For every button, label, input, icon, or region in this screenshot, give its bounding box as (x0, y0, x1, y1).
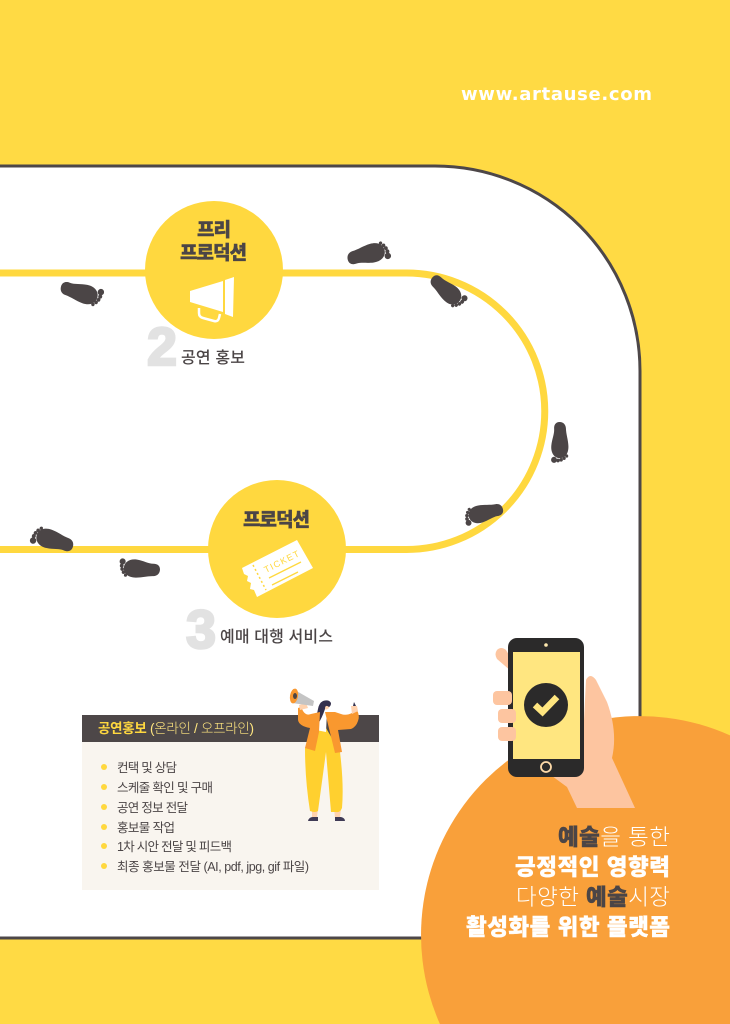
hand and arm (540, 676, 635, 808)
slogan text: 긍정적인 영향력 (515, 855, 670, 880)
heading: production: 프로덕션 (243, 509, 310, 531)
number 2: 2 (147, 317, 177, 377)
slogan text: 활성화를 위한 플랫폼 (466, 915, 670, 940)
bullet list (101, 761, 309, 874)
step circle: production (208, 480, 346, 618)
panel: promotion list (82, 715, 379, 890)
heading: pre-production: 프리 (197, 219, 231, 241)
footprints (29, 240, 569, 580)
icon: ticket: TICKET (262, 548, 302, 575)
icon: check mark (524, 683, 568, 727)
label: performance promotion: 공연 홍보 (181, 349, 245, 367)
bullet list: 홍보물 작업 (117, 821, 175, 835)
website url: www.artause.com (461, 84, 652, 105)
panel heading: 공연홍보 (온라인 / 오프라인) (98, 720, 254, 736)
bullet list: 공연 정보 전달 (117, 801, 188, 815)
fingers (493, 691, 516, 741)
heading: pre-production: 프로덕션 (180, 242, 247, 264)
bullet list: 1차 시안 전달 및 피드백 (117, 840, 232, 854)
slogan text: 다양한 예술시장 (516, 885, 670, 910)
bullet list: 스케줄 확인 및 구매 (117, 781, 213, 795)
bullet list: 최종 홍보물 전달 (AI, pdf, jpg, gif 파일) (117, 860, 309, 874)
number 3: 3 (186, 600, 216, 660)
slogan text (466, 825, 670, 940)
illustration: hand holding phone (493, 638, 635, 808)
icon: megaphone (190, 277, 234, 321)
label: ticketing agency service: 예매 대행 서비스 (220, 628, 333, 646)
orange circle (421, 716, 730, 1024)
bullet list: 컨택 및 상담 (117, 761, 177, 775)
route track (0, 273, 545, 550)
panel: white route area (0, 166, 640, 938)
step circle: pre-production (145, 201, 283, 339)
heading: pre-production (180, 219, 247, 264)
illustration: woman with megaphone (289, 688, 359, 821)
phone body (508, 638, 584, 777)
slogan text: 예술을 통한 (558, 825, 670, 850)
